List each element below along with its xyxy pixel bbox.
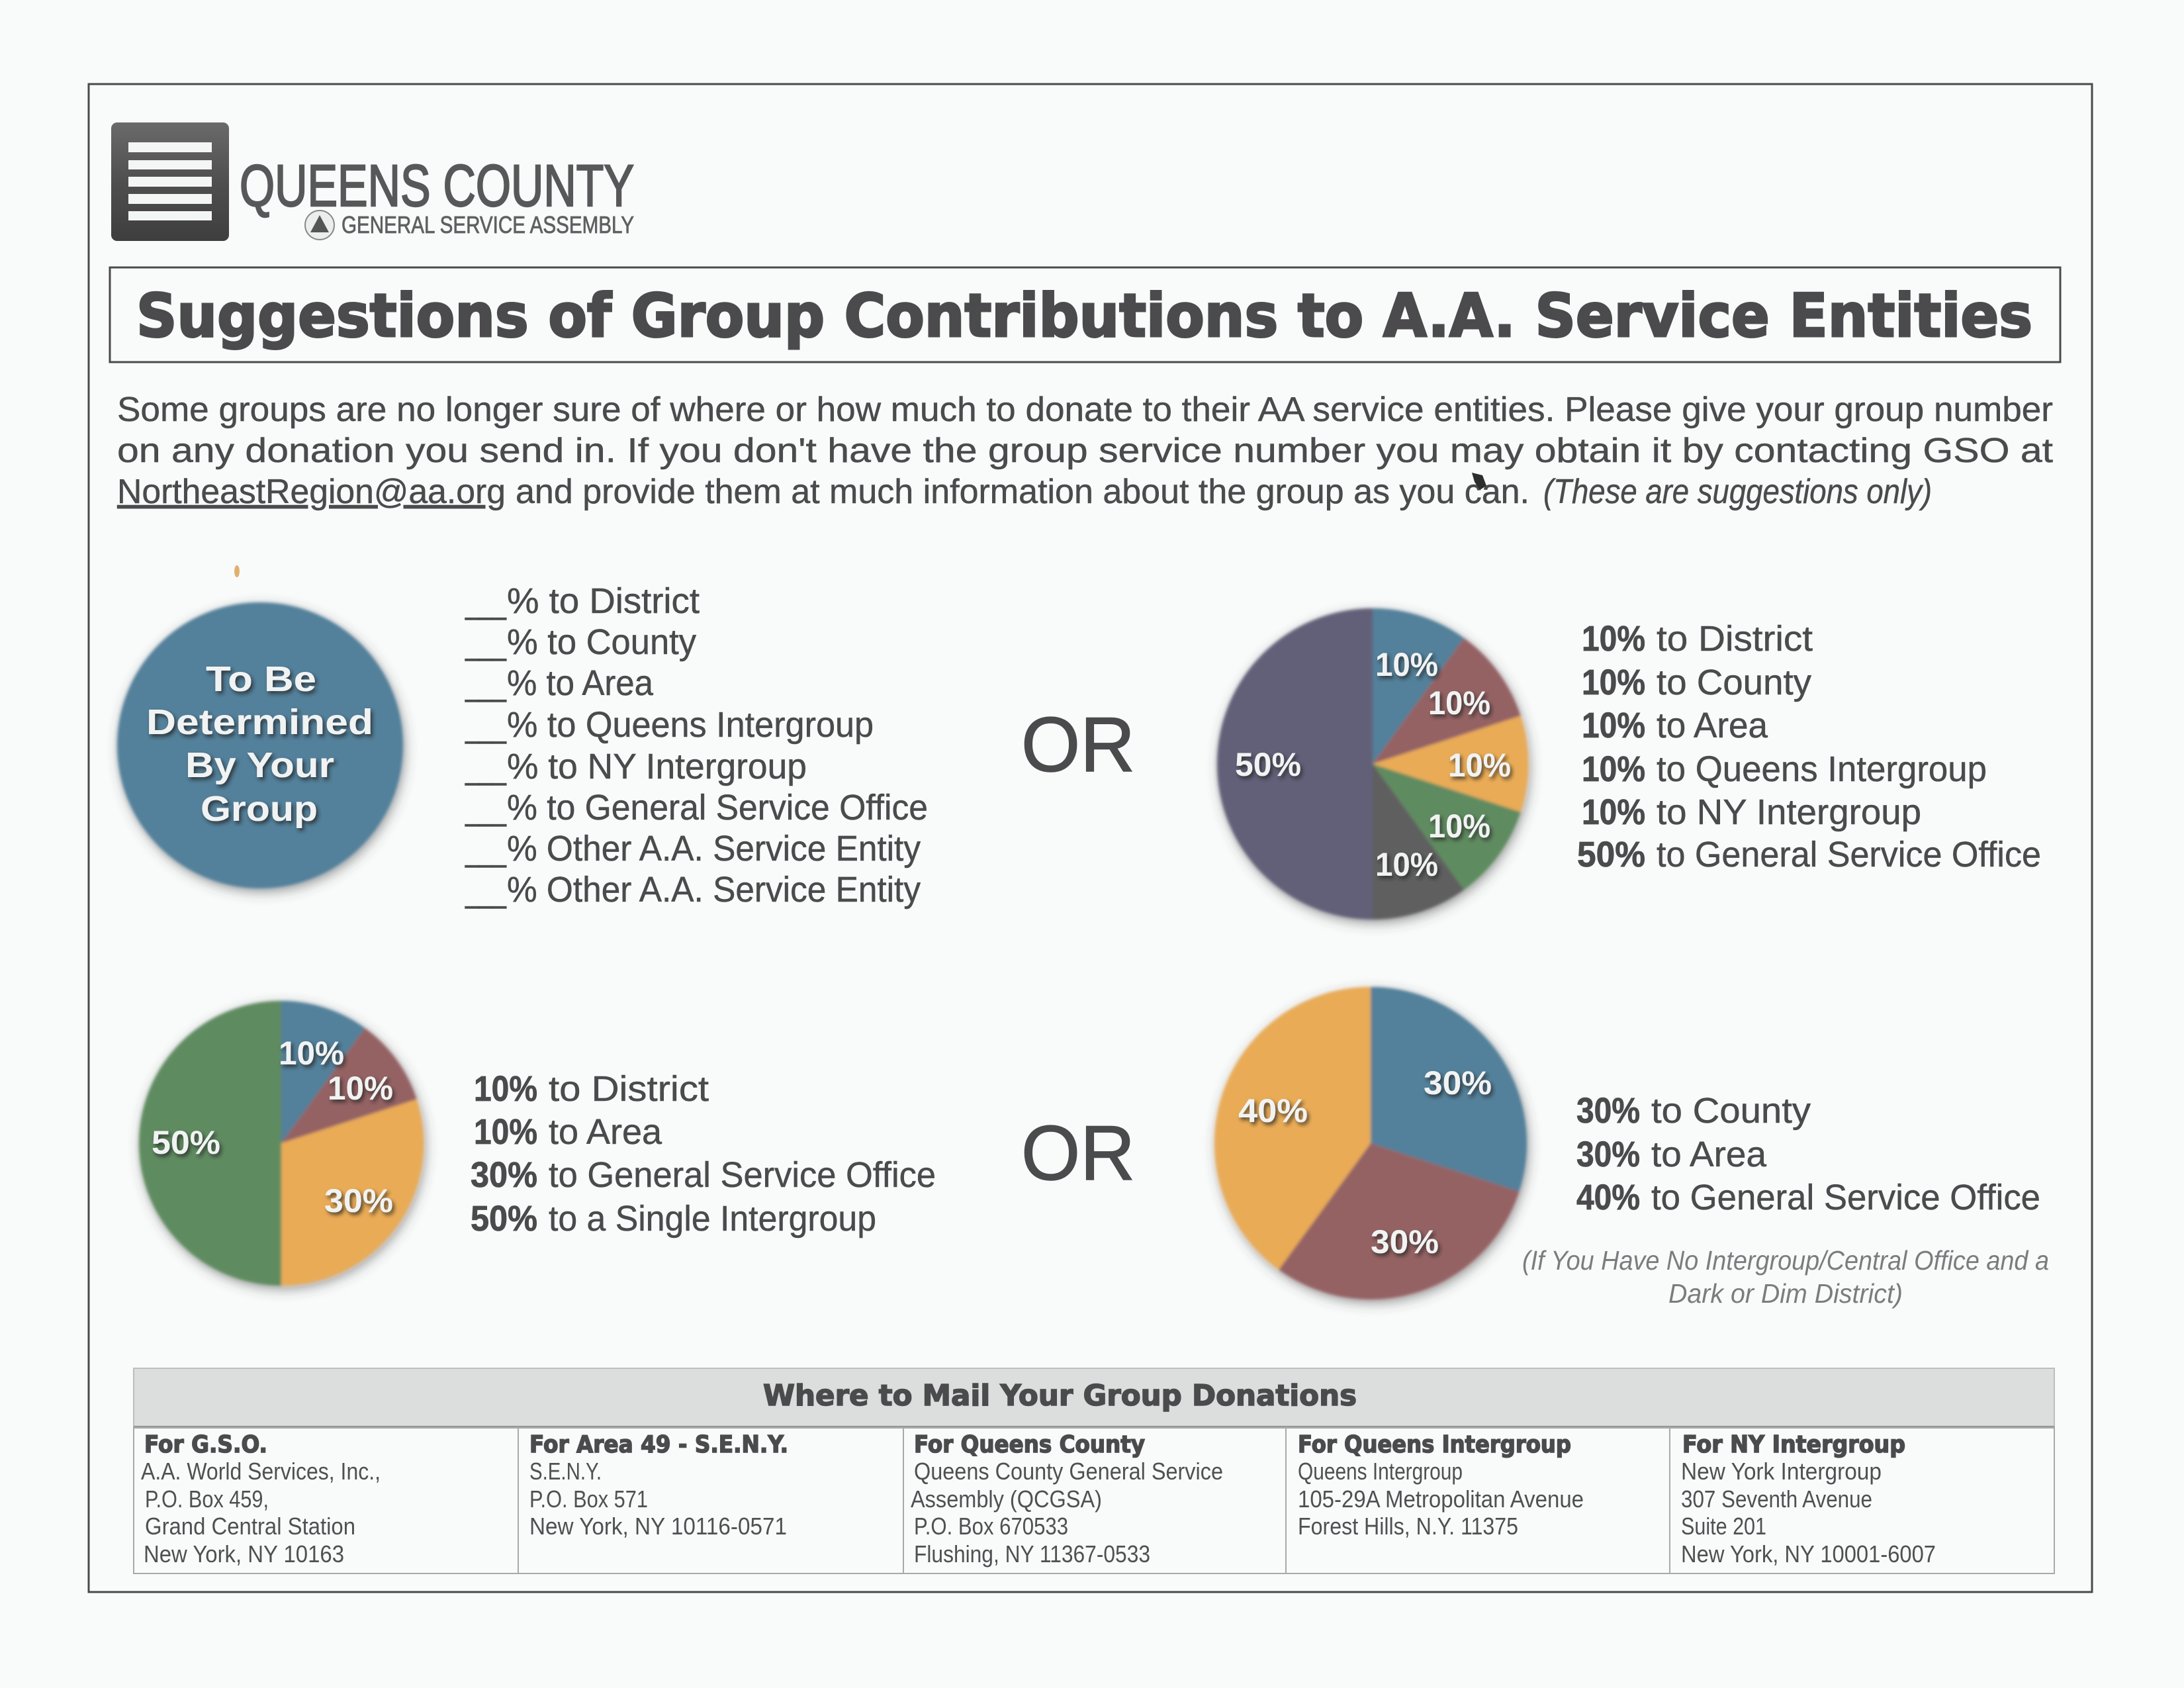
intro paragraph: Some groups are no longer sure of where or how much to donate to their AA service entities. Please give your group number	[117, 391, 2053, 429]
logo subtitle: GENERAL SERVICE ASSEMBLY	[341, 211, 634, 238]
list: fill-in percentages: % to County	[507, 622, 696, 662]
list: four-way split: 30%	[471, 1155, 537, 1195]
column: G.S.O.	[141, 1431, 381, 1568]
pie: six-way split	[1217, 608, 1528, 919]
list: six-way split: 10%	[1582, 619, 1645, 659]
list: fill-in percentages: ___	[465, 663, 507, 703]
column: G.S.O.: Grand Central Station	[145, 1513, 355, 1540]
pie labels: 10%	[1448, 747, 1511, 784]
list: four-way split: to District	[549, 1069, 709, 1109]
list: six-way split: to General Service Office	[1657, 835, 2041, 874]
list: six-way split: 10%	[1582, 663, 1645, 702]
column: Queens Intergroup: For Queens Intergroup	[1298, 1431, 1571, 1458]
pie labels: 10%	[1375, 846, 1438, 883]
list: four-way split: 10%	[474, 1112, 537, 1152]
list: four-way split: 10%	[474, 1069, 537, 1109]
pie label	[146, 659, 373, 829]
italic note: (If You Have No Intergroup/Central Office and a	[1522, 1245, 2049, 1276]
list: six-way split: 50%	[1577, 835, 1645, 874]
list: six-way split: to District	[1657, 619, 1813, 659]
column: Queens Intergroup: Forest Hills, N.Y. 11375	[1298, 1513, 1518, 1540]
list: fill-in percentages: % to General Service Office	[507, 788, 928, 827]
column: NY Intergroup: New York Intergroup	[1681, 1458, 1882, 1485]
list: four-way split: to General Service Office	[549, 1155, 936, 1195]
column: G.S.O.: New York, NY 10163	[144, 1540, 344, 1568]
list: three-way split	[1576, 1091, 2040, 1217]
list: four-way split: 50%	[471, 1199, 537, 1239]
column: NY Intergroup: New York, NY 10001-6007	[1681, 1540, 1936, 1568]
column: Queens Intergroup: 105-29A Metropolitan Avenue	[1298, 1485, 1584, 1513]
column: NY Intergroup: Suite 201	[1681, 1513, 1766, 1540]
pie labels: 30%	[1424, 1064, 1492, 1102]
list: fill-in percentages: ___	[465, 705, 507, 745]
OR (top): OR	[1021, 701, 1135, 788]
pie labels: 10%	[1428, 684, 1490, 722]
list: six-way split: to NY Intergroup	[1657, 792, 1921, 832]
column: Queens County	[911, 1431, 1223, 1568]
OR (bottom): OR	[1021, 1109, 1135, 1196]
pie labels	[1238, 1064, 1492, 1260]
pie labels	[152, 1035, 393, 1219]
pie labels: 30%	[324, 1182, 393, 1219]
pie labels	[1235, 646, 1511, 883]
table heading: Where to Mail Your Group Donations	[763, 1379, 1357, 1413]
list: six-way split: to Area	[1657, 706, 1768, 745]
list: three-way split: 40%	[1576, 1178, 1640, 1217]
column: Area 49: For Area 49 - S.E.N.Y.	[529, 1431, 788, 1458]
pie labels: 30%	[1371, 1223, 1439, 1260]
column: Queens County: Flushing, NY 11367-0533	[914, 1540, 1150, 1568]
list: six-way split: 10%	[1582, 706, 1645, 745]
column: G.S.O.: P.O. Box 459,	[145, 1485, 269, 1513]
column: Queens Intergroup: Queens Intergroup	[1298, 1458, 1463, 1485]
list: fill-in percentages: ___	[465, 581, 507, 621]
list: fill-in percentages: ___	[465, 622, 507, 662]
column: Queens County: Queens County General Service	[914, 1458, 1223, 1485]
pie: four-way split	[139, 1001, 424, 1286]
column: NY Intergroup: For NY Intergroup	[1682, 1431, 1905, 1458]
italic note	[1522, 1245, 2049, 1309]
list: four-way split: to a Single Intergroup	[549, 1199, 876, 1239]
list: fill-in percentages: % to NY Intergroup	[507, 747, 807, 786]
title: Suggestions of Group Contributions to A.A. Service Entities	[136, 281, 2032, 351]
intro paragraph: (These are suggestions only)	[1543, 473, 1932, 511]
intro paragraph: on any donation you send in. If you don't have the group service number you may obtain it by contacting GSO at	[117, 432, 2054, 470]
column: Queens Intergroup	[1298, 1431, 1584, 1540]
pie label: Group	[201, 789, 318, 829]
list: six-way split: 10%	[1582, 792, 1645, 832]
pie: to be determined by your group	[117, 602, 403, 888]
list: fill-in percentages: % Other A.A. Service Entity	[507, 870, 921, 910]
column: Queens County: Assembly (QCGSA)	[911, 1485, 1102, 1513]
list: six-way split: to County	[1657, 663, 1811, 702]
list: four-way split: to Area	[549, 1112, 662, 1152]
pie labels: 10%	[1375, 646, 1438, 683]
column: Area 49: New York, NY 10116-0571	[529, 1513, 787, 1540]
title box	[110, 267, 2060, 362]
list: fill-in percentages: % to Queens Intergroup	[507, 705, 874, 745]
pie labels: 50%	[152, 1124, 220, 1161]
table: where to mail donations	[134, 1368, 2054, 1573]
list: fill-in percentages: % Other A.A. Service Entity	[507, 829, 921, 868]
column: NY Intergroup	[1681, 1431, 1936, 1568]
column: G.S.O.: A.A. World Services, Inc.,	[141, 1458, 381, 1485]
pie labels: 50%	[1235, 746, 1301, 783]
column: Area 49: S.E.N.Y.	[529, 1458, 602, 1485]
list: three-way split: to County	[1651, 1091, 1811, 1131]
pie labels: 10%	[1428, 808, 1490, 845]
pie labels: 40%	[1238, 1092, 1308, 1129]
list: fill-in percentages: % to District	[507, 581, 700, 621]
pie: three-way split	[1214, 987, 1527, 1299]
pie labels: 10%	[279, 1035, 344, 1072]
pie label: Determined	[146, 702, 373, 742]
column: Queens County: For Queens County	[914, 1431, 1145, 1458]
column: Queens County: P.O. Box 670533	[914, 1513, 1068, 1540]
list: six-way split: 10%	[1582, 749, 1645, 789]
italic note: Dark or Dim District)	[1668, 1278, 1903, 1309]
intro paragraph	[117, 391, 2054, 511]
column: Area 49: P.O. Box 571	[529, 1485, 648, 1513]
icon: A.A. circle triangle	[305, 211, 334, 240]
table header band	[134, 1368, 2054, 1427]
list: four-way split	[471, 1069, 936, 1239]
icon: logo tile with stripes	[111, 122, 229, 241]
pie labels: 10%	[328, 1070, 393, 1107]
list: fill-in percentages: ___	[465, 870, 507, 910]
intro paragraph: NortheastRegion@aa.org	[117, 473, 506, 511]
list: three-way split: to General Service Office	[1651, 1178, 2040, 1217]
logo: Queens County General Service Assembly	[111, 122, 634, 241]
logo wordmark: QUEENS COUNTY	[240, 152, 634, 218]
pie label: To Be	[206, 659, 316, 699]
intro paragraph: and provide them at much information about the group as you can.	[516, 473, 1529, 511]
list: fill-in percentages: ___	[465, 747, 507, 786]
list: fill-in percentages: ___	[465, 829, 507, 868]
list: six-way split: to Queens Intergroup	[1657, 749, 1987, 789]
list: three-way split: to Area	[1651, 1135, 1767, 1174]
list: fill-in percentages: ___	[465, 788, 507, 827]
list: fill-in percentages	[465, 581, 928, 910]
list: three-way split: 30%	[1576, 1135, 1640, 1174]
list: three-way split: 30%	[1576, 1091, 1640, 1131]
column: NY Intergroup: 307 Seventh Avenue	[1681, 1485, 1872, 1513]
column: Area 49	[529, 1431, 788, 1540]
pie label: By Your	[185, 745, 334, 785]
column: G.S.O.: For G.S.O.	[144, 1431, 267, 1458]
list: six-way split	[1577, 619, 2041, 874]
list: fill-in percentages: % to Area	[507, 663, 654, 703]
